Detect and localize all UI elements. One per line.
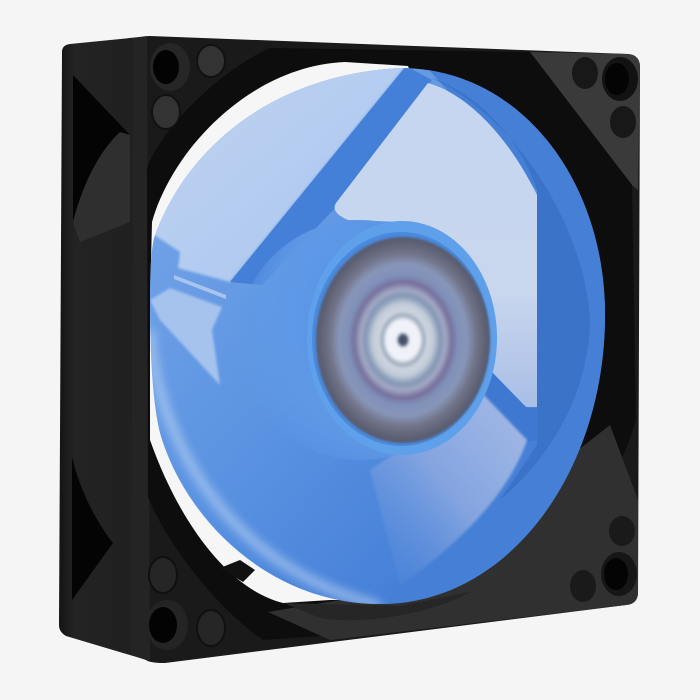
bottom band [283,592,470,620]
strut lower right [485,372,537,434]
fan frame [59,36,640,663]
stripe light [174,275,226,299]
side window bottom [72,457,113,600]
frame side face [59,36,165,662]
frame bevel edge [131,36,150,661]
pin bottom right 2 [609,516,635,546]
frame front face [132,36,640,663]
pin top right 1 [572,57,598,89]
hole top left [150,43,190,91]
blade lower left gloss [150,288,222,385]
hub outer ring [307,221,497,455]
pin bottom left [149,557,177,593]
pin bottom [197,610,225,646]
hole bottom right [601,552,637,596]
pin left [152,95,180,129]
corner top right [530,52,640,190]
white opening behind rotor [150,62,500,603]
blade upper right [334,83,537,407]
cable [220,560,255,582]
hub ring shade [312,232,490,446]
hub [307,221,497,455]
side window top [73,75,130,222]
hub cone [252,220,395,460]
blade upper left [150,60,406,282]
strut upper [230,66,432,285]
blade strut stripes [174,66,432,299]
hole top right [602,57,638,101]
inner black ring [147,48,636,640]
hole bottom left [146,600,188,650]
mounting holes [146,43,638,650]
rotor [140,60,620,610]
soft lower left edge glow [150,330,380,606]
pin top right 2 [610,106,636,138]
side strut top [73,132,130,242]
pin top [197,45,225,77]
corner bottom right [268,425,638,640]
pin bottom right 1 [570,570,596,602]
blade lower right [370,393,527,585]
rim shade right [384,70,605,604]
rotor base disc [140,60,620,610]
product photo: blue case fan [59,36,640,663]
hub face with concentric rings [316,237,490,443]
rim inner dark strip [432,78,590,500]
